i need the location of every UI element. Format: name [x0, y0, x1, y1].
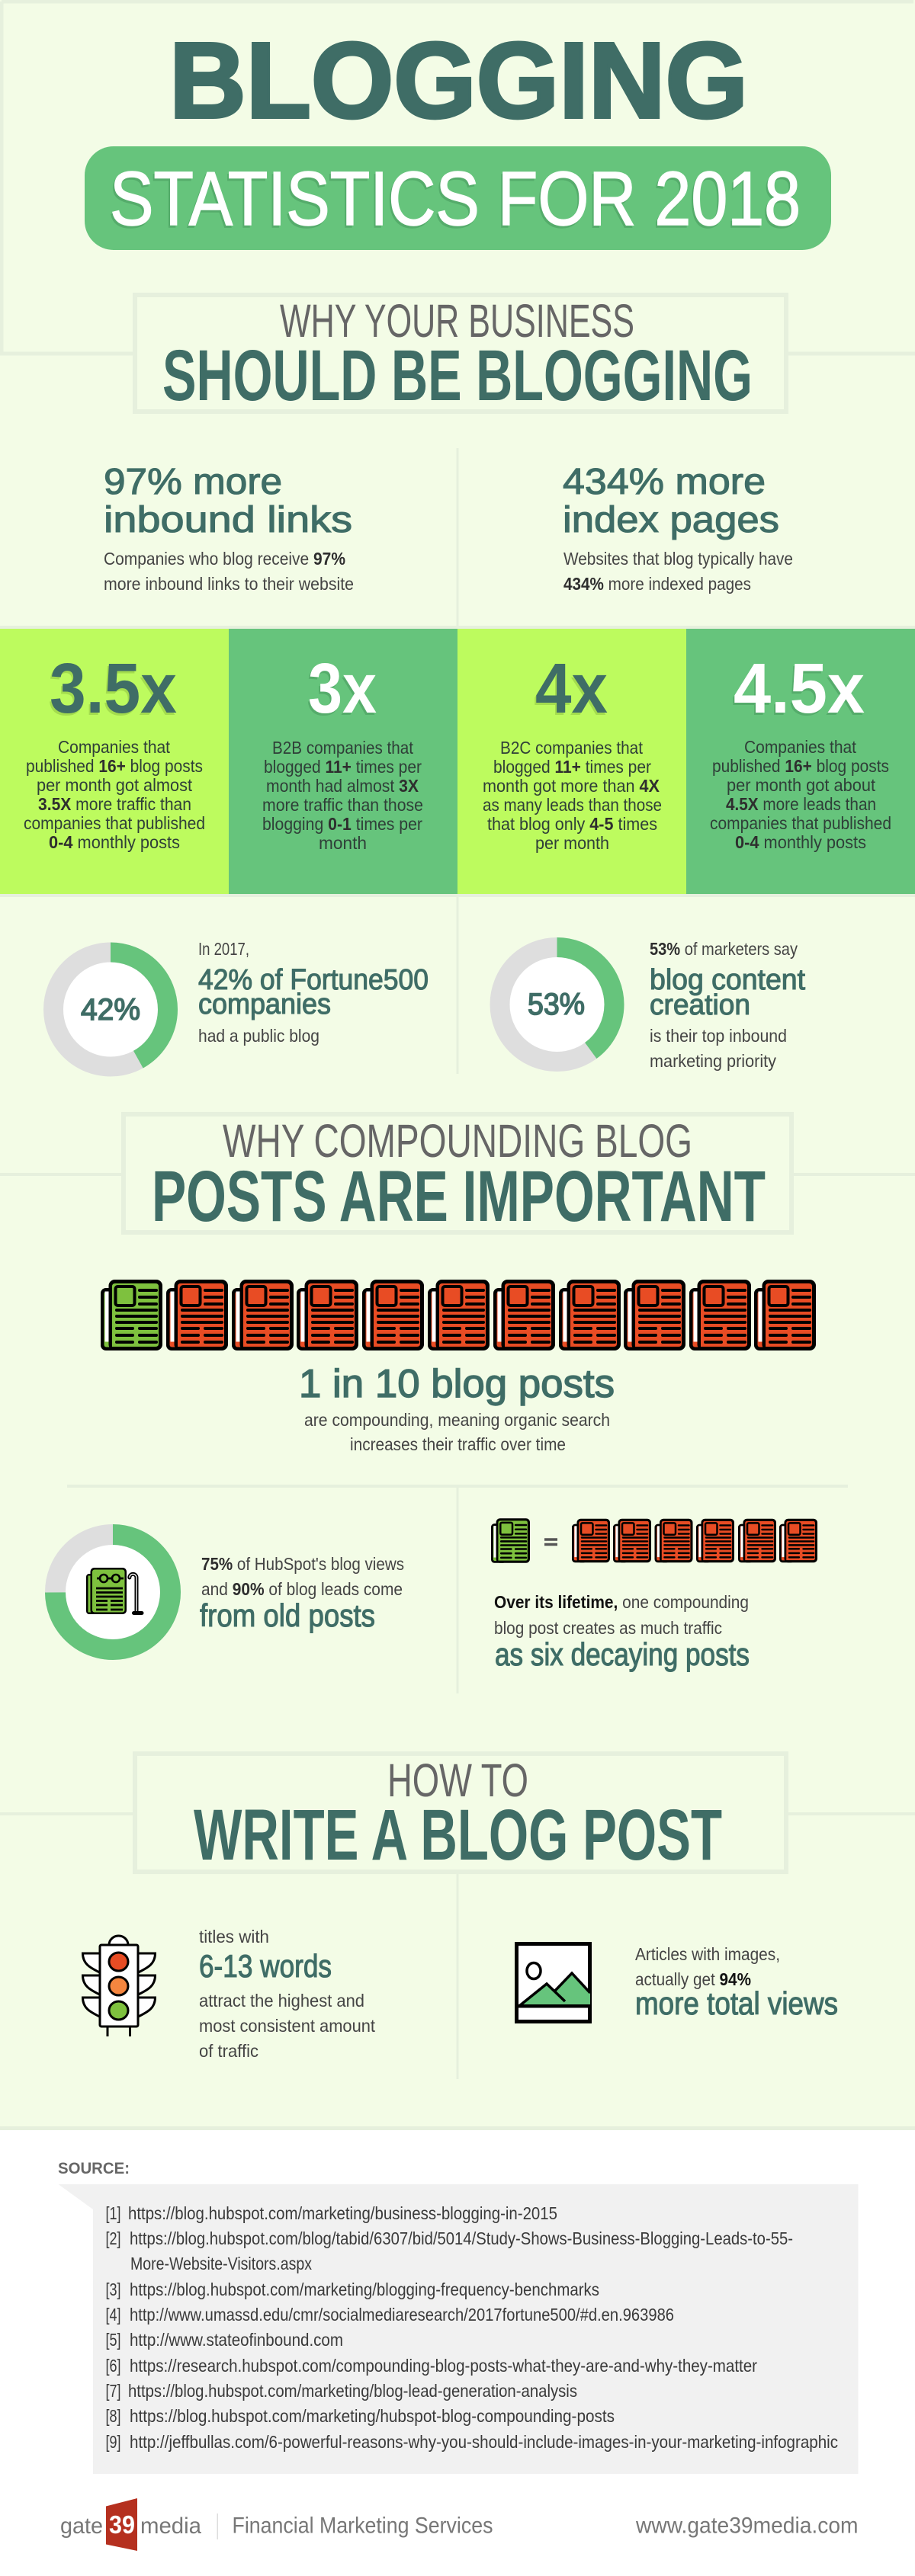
stat: 97% more inbound links: Companies who blog receive 97% [104, 549, 345, 569]
stat: 434% more index pages: 434% more [563, 462, 766, 502]
footer tagline: Financial Marketing Services [232, 2514, 493, 2538]
donut chart: 53% [500, 947, 615, 1062]
panel: 3.5x traffic: Companies that [58, 737, 171, 757]
heading: why compounding blog posts are important [124, 1114, 791, 1237]
section line [67, 1485, 848, 1488]
text: articles with images: actually get 94% [635, 1969, 751, 1989]
icon: old post with glasses and cane [86, 1568, 142, 1614]
text: blog content creation: marketing priority [650, 1051, 776, 1071]
heading line 1: HOW TO [387, 1754, 528, 1806]
source 9: http://jeffbullas.com/6-powerful-reasons-why-you-should-include-images-in-your-marketing-infographic [130, 2432, 838, 2452]
source 2: More-Website-Visitors.aspx [130, 2254, 312, 2273]
text: articles with images: Articles with images, [635, 1944, 780, 1964]
divider [456, 1488, 459, 1693]
panel: 4x leads: 4x [535, 649, 608, 728]
icon: decaying post 9 [689, 1280, 751, 1350]
panel: 3.5x traffic: 3.5x [50, 649, 177, 728]
source 2 [105, 2228, 793, 2273]
pill text: STATISTICS FOR 2018 [110, 156, 801, 242]
panel: 3.5x traffic: companies that published [24, 813, 205, 833]
text: 75% of HubSpot's blog views: from old posts [200, 1597, 375, 1633]
section line [0, 1812, 915, 1815]
source 2: [2] [105, 2228, 120, 2248]
text: over its lifetime: blog post creates as much traffic [494, 1618, 722, 1638]
panel: 3.5x traffic: per month got almost [37, 775, 193, 795]
top title panel outline [0, 2, 915, 354]
panel: source list [58, 2184, 859, 2474]
icon: traffic light [82, 1936, 156, 2036]
footer url: www.gate39media.com [635, 2514, 859, 2538]
source 8: [8] [105, 2406, 120, 2426]
icon: decaying post 3 [297, 1280, 358, 1350]
text: titles with 6-13 words: titles with [199, 1927, 269, 1946]
text: articles with images [635, 1944, 838, 2021]
donut chart: 42% [53, 953, 168, 1067]
text: blog content creation [650, 939, 805, 1071]
panel: 4x leads: month got more than 4X [483, 776, 660, 796]
panel: 4x leads: B2C companies that [500, 738, 644, 758]
title pill: Statistics for 2018 [85, 146, 831, 250]
panel: 4.5x leads: Companies that [744, 737, 857, 757]
section bottom line [0, 2126, 915, 2130]
source 9: [9] [105, 2432, 120, 2452]
panel: 3x traffic: month [319, 833, 367, 853]
icon: decaying post 1 [166, 1280, 228, 1350]
source 1: [1] [105, 2203, 120, 2223]
source 4: http://www.umassd.edu/cmr/socialmediaresearch/2017fortune500/#d.en.963986 [130, 2305, 674, 2324]
text: 42% of Fortune500: 42% of Fortune500 [198, 964, 429, 996]
panel: 4x leads: per month [535, 833, 609, 853]
heading line 1: WHY YOUR BUSINESS [280, 295, 634, 347]
icon: decaying post 6 [779, 1519, 817, 1562]
text: blog content creation: blog content [650, 964, 805, 996]
icon: decaying post 3 [654, 1519, 692, 1562]
donut chart: 42%: 42% [81, 993, 140, 1027]
text: 75% of HubSpot's blog views: 75% of HubSpot's blog views [201, 1554, 404, 1574]
donut chart: 53%: 53% [528, 988, 585, 1021]
panel: 4.5x leads [686, 629, 915, 894]
panel: 3x traffic: month had almost 3X [266, 776, 419, 796]
source 3: [3] [105, 2280, 120, 2299]
icon: compounding post [101, 1280, 162, 1350]
icon: compounding post [491, 1518, 530, 1563]
panel: 3x traffic: more traffic than those [262, 795, 423, 815]
footer logo: gate 39 media: 39 [109, 2510, 135, 2539]
equals sign [544, 1540, 557, 1544]
heading: how to write a blog post [135, 1754, 786, 1876]
panel: 3.5x traffic [0, 629, 229, 894]
text: 75% of HubSpot's blog views: and 90% of blog leads come [201, 1579, 403, 1599]
stat: 97% more inbound links [104, 462, 354, 594]
icon: decaying post 5 [738, 1519, 776, 1562]
section line [0, 1173, 915, 1176]
stat: 434% more index pages: Websites that blog typically have [563, 549, 793, 569]
stat: 434% more index pages: 434% more indexed pages [563, 574, 751, 594]
panel: 4.5x leads: companies that published [710, 813, 891, 833]
icon: decaying post 6 [493, 1280, 555, 1350]
footer divider [217, 2514, 218, 2539]
title: Blogging: BLOGGING [169, 20, 748, 140]
equation icons: one compounding equals six decaying [491, 1518, 817, 1563]
source 6: [6] [105, 2356, 120, 2376]
text: 1 in 10 blog posts: increases their traffic over time [350, 1434, 566, 1454]
source 7: https://blog.hubspot.com/marketing/blog-lead-generation-analysis [128, 2381, 577, 2401]
panel: 3x traffic: B2B companies that [272, 738, 414, 758]
icon: decaying post 4 [696, 1519, 734, 1562]
text: 1 in 10 blog posts: are compounding, meaning organic search [304, 1410, 610, 1430]
stat: 97% more inbound links: 97% more [104, 462, 282, 502]
text: 42% of Fortune500 [198, 939, 429, 1046]
icon: decaying post 8 [624, 1280, 685, 1350]
stat: 97% more inbound links: more inbound links to their website [104, 574, 354, 594]
panel: 3x traffic: blogging 0-1 times per [262, 814, 422, 834]
source 5: http://www.stateofinbound.com [130, 2330, 343, 2350]
icon: decaying post 10 [754, 1280, 816, 1350]
text: 1 in 10 blog posts [299, 1362, 615, 1454]
panel: 3.5x traffic: 0-4 monthly posts [49, 832, 180, 852]
text: blog content creation: 53% of marketers say [650, 939, 798, 959]
source 7: [7] [105, 2381, 120, 2401]
panel: donut stats [53, 897, 805, 1074]
text: 42% of Fortune500: had a public blog [198, 1026, 319, 1046]
source 2: https://blog.hubspot.com/blog/tabid/6307/bid/5014/Study-Shows-Business-Blogging-Leads-to-55- [130, 2228, 793, 2248]
heading line 1: WHY COMPOUNDING BLOG [223, 1115, 692, 1167]
text: over its lifetime [494, 1592, 750, 1672]
icon: decaying post 2 [232, 1280, 294, 1350]
text: 42% of Fortune500: In 2017, [198, 939, 249, 959]
text: over its lifetime: as six decaying posts [495, 1636, 750, 1672]
text: titles with 6-13 words: 6-13 words [199, 1948, 332, 1984]
source 3: https://blog.hubspot.com/marketing/blogging-frequency-benchmarks [130, 2280, 599, 2299]
panel: 3x traffic: 3x [308, 649, 377, 728]
icon: decaying post 5 [428, 1280, 490, 1350]
panel: 3.5x traffic: 3.5X more traffic than [38, 794, 191, 814]
panel: 4.5x leads: per month got about [727, 775, 876, 795]
donut chart: 75% from old posts [55, 1535, 171, 1649]
source 5: [5] [105, 2330, 120, 2350]
stat: 434% more index pages: index pages [563, 500, 779, 540]
icon row: 1 green and 10 red blog posts [101, 1280, 816, 1350]
text: titles with 6-13 words: of traffic [199, 2041, 258, 2061]
divider [456, 1873, 459, 2079]
text: titles with 6-13 words: attract the highest and [199, 1991, 364, 2010]
text: 42% of Fortune500: companies [198, 988, 331, 1020]
text: blog content creation: is their top inbound [650, 1026, 787, 1046]
footer logo: gate 39 media: media [140, 2514, 201, 2539]
icon: decaying post 1 [572, 1519, 610, 1562]
panel: 4x leads: that blog only 4-5 times [487, 814, 657, 834]
text: titles with 6-13 words [199, 1927, 376, 2061]
text: blog content creation: creation [650, 989, 750, 1021]
text: 75% of HubSpot's blog views [200, 1554, 404, 1633]
panel: 4x leads [458, 629, 686, 894]
heading: why your business should be blogging [135, 295, 786, 416]
panel: 4.5x leads: 4.5X more leads than [726, 794, 876, 814]
source 8: https://blog.hubspot.com/marketing/hubspot-blog-compounding-posts [130, 2406, 615, 2426]
panel: 4.5x leads: 0-4 monthly posts [735, 832, 866, 852]
stat: 97% more inbound links: inbound links [104, 500, 352, 540]
icon: image with mountains [516, 1943, 590, 2021]
footer logo: gate 39 media: gate [60, 2514, 103, 2539]
icon: decaying post 4 [362, 1280, 424, 1350]
panel: 4x leads: blogged 11+ times per [493, 757, 651, 777]
text: articles with images: more total views [635, 1985, 838, 2021]
stat: 434% more index pages [563, 462, 793, 594]
icon: decaying post 2 [613, 1519, 651, 1562]
panel: 4x leads: as many leads than those [483, 795, 662, 815]
panel: inbound links and index pages [104, 448, 793, 626]
panel: 4.5x leads: 4.5x [734, 649, 865, 728]
source label: SOURCE: [58, 2160, 130, 2177]
strip outline [0, 626, 915, 897]
text: titles with 6-13 words: most consistent amount [199, 2016, 376, 2036]
panel: 3x traffic [229, 629, 458, 894]
source 6: https://research.hubspot.com/compounding-blog-posts-what-they-are-and-why-they-matter [130, 2356, 757, 2376]
source 4: [4] [105, 2305, 120, 2324]
text: 1 in 10 blog posts: 1 in 10 blog posts [299, 1362, 615, 1406]
source 1: https://blog.hubspot.com/marketing/business-blogging-in-2015 [128, 2203, 557, 2223]
text: over its lifetime: Over its lifetime, one compounding [494, 1592, 749, 1612]
panel: 3x traffic: blogged 11+ times per [264, 757, 422, 777]
footer logo: gate 39 media [60, 2498, 201, 2551]
panel: 3.5x traffic: published 16+ blog posts [26, 756, 203, 776]
panel: 4.5x leads: published 16+ blog posts [712, 756, 889, 776]
icon: decaying post 7 [559, 1280, 621, 1350]
